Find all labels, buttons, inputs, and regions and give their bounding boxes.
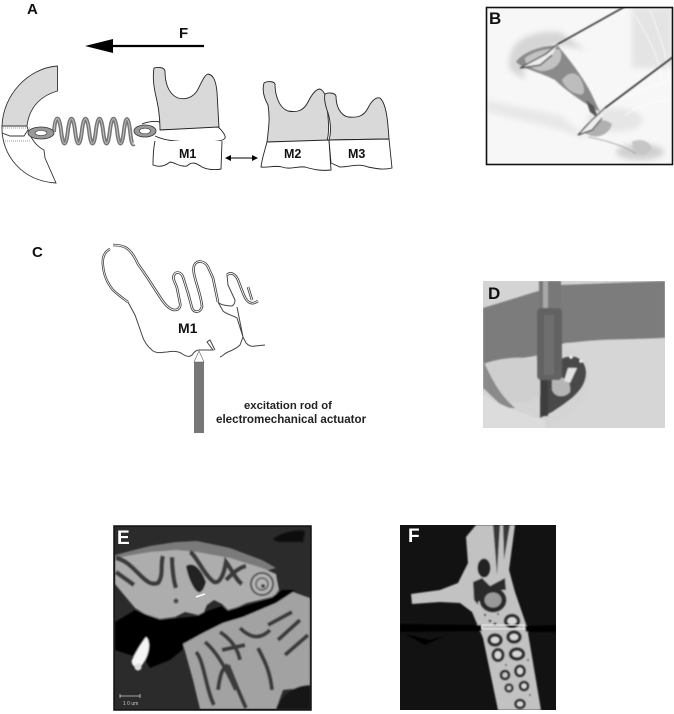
panel F: micro-CT coronal section	[400, 525, 556, 710]
upper jaw bone layer	[115, 541, 276, 572]
dark spot top right	[273, 531, 305, 542]
scale bar	[120, 694, 140, 707]
label F: F	[408, 526, 420, 547]
upper jaw molars	[115, 550, 279, 619]
double arrow	[225, 155, 258, 161]
occlusal black gap	[115, 590, 296, 668]
mouth	[540, 357, 586, 418]
panel E: micro-CT sagittal section	[114, 526, 311, 710]
label A: A	[27, 1, 38, 18]
label C: C	[32, 244, 43, 261]
tooth M2	[261, 82, 331, 170]
force arrow F: F	[179, 25, 188, 42]
label E: E	[117, 528, 130, 549]
excitation rod	[194, 362, 204, 433]
lower jaw molars	[183, 592, 310, 709]
caption: electromechanical actuator	[216, 413, 367, 426]
tooth rings	[482, 590, 528, 708]
panel A: orthodontic spring diagram	[2, 1, 392, 183]
retraction hooks	[520, 6, 673, 135]
scale bar: 1 0 um	[123, 701, 138, 707]
caption: excitation rod of	[244, 400, 332, 412]
label M3: M3	[348, 147, 365, 161]
lower lip	[588, 137, 636, 154]
caption	[216, 400, 367, 426]
actuator rod	[538, 281, 562, 292]
label M1: M1	[179, 147, 196, 161]
radiopaque spot	[132, 637, 149, 668]
left ring	[28, 127, 54, 139]
speckles	[484, 613, 531, 696]
panel B: photo of rat mouth with hooks	[486, 6, 673, 164]
anchor incisor	[2, 66, 58, 183]
label D: D	[488, 284, 500, 303]
force arrow F	[85, 25, 204, 53]
label B: B	[489, 9, 501, 28]
right ring	[134, 125, 156, 137]
panel C: tooth section diagram with actuator rod	[32, 244, 367, 433]
label M2: M2	[284, 147, 301, 161]
measurement line	[196, 594, 205, 597]
tooth outline M1	[103, 245, 265, 357]
spring	[54, 119, 134, 144]
tooth M1	[142, 67, 225, 170]
measurement box	[482, 625, 524, 629]
panel D: photo of actuator on rat tooth	[483, 281, 665, 428]
label M1: M1	[178, 320, 198, 336]
black artefact band	[400, 624, 556, 632]
mouth opening	[516, 46, 600, 112]
tooth M3	[325, 93, 392, 169]
bone	[411, 525, 541, 710]
